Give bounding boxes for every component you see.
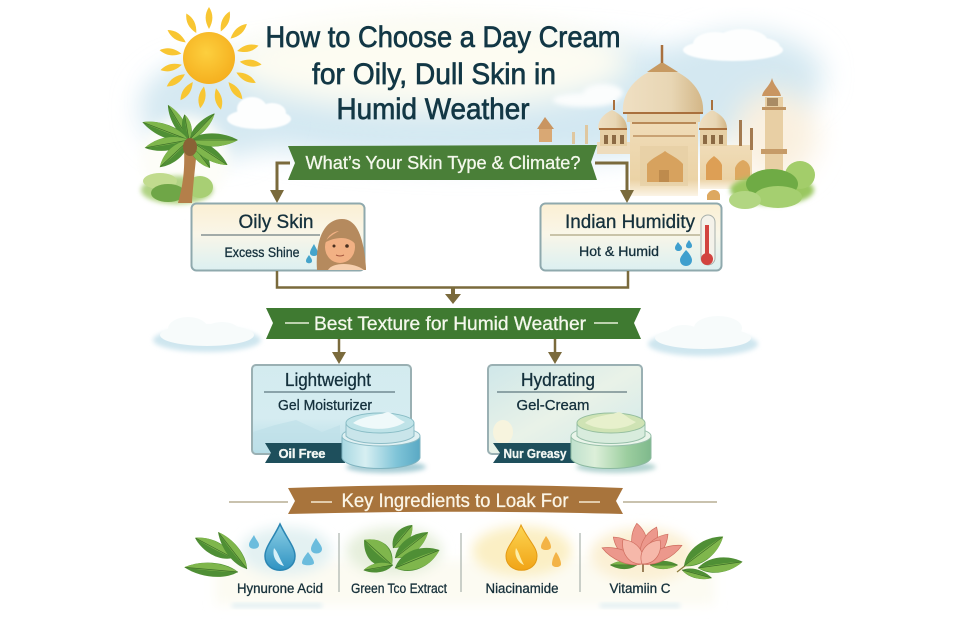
- icon: leaves right: [677, 529, 744, 582]
- label: Hynurone Acid: [237, 581, 323, 596]
- icon: small drops: [249, 535, 322, 565]
- title: [266, 21, 620, 126]
- indian humidity heading: Indian Humidity: [565, 212, 695, 233]
- banner: skin type and climate: What’s Your Skin Type & Climate?: [306, 153, 580, 173]
- icon: girl portrait: [317, 219, 366, 270]
- ingredient: green tea extract: [351, 520, 447, 596]
- arrow: banner to lightweight: [332, 339, 346, 364]
- banner: best texture: Best Texture for Humid Weather: [314, 314, 587, 335]
- banner: skin type and climate: [288, 145, 597, 180]
- tag: nur greasy: Nur Greasy: [504, 446, 567, 461]
- banner: key ingredients: [288, 485, 623, 514]
- header watercolour backdrop: [140, 14, 823, 205]
- icon: tea leaves: [357, 520, 443, 577]
- icon: small oil drops: [541, 536, 561, 567]
- tag: oil free: [265, 443, 345, 463]
- connector: boxes to texture banner: [277, 271, 628, 304]
- icon: oil drop: [506, 525, 537, 570]
- ingredient backdrops: [215, 526, 715, 608]
- indian humidity subtext: Hot & Humid: [579, 243, 659, 259]
- cloud: behind taj: [553, 84, 623, 107]
- icon: water drop: [265, 524, 295, 570]
- icon: gel jar blue: [342, 412, 426, 473]
- icon: sun: [159, 7, 262, 110]
- panel: lightweight gel moisturizer: [252, 365, 426, 473]
- divider lines beside ingredients banner: [229, 501, 717, 503]
- lightweight subtext: Gel Moisturizer: [278, 397, 372, 414]
- illustration: green bush right: [729, 161, 815, 209]
- icon: leaves left: [184, 528, 252, 579]
- ingredient: vitamin c: [600, 522, 744, 596]
- ingredient: niacinamide: [486, 525, 561, 596]
- icon: lotus flower: [600, 522, 684, 572]
- title: How to Choose a Day Cream: [266, 21, 620, 54]
- panel: hydrating gel-cream: [488, 365, 656, 473]
- banner: key ingredients: Key Ingredients to Loak For: [342, 491, 569, 512]
- ingredient: hyaluronic acid: [184, 524, 323, 596]
- lightweight heading: Lightweight: [285, 370, 371, 390]
- banner: best texture: [266, 308, 641, 339]
- label: Green Tco Extract: [351, 581, 447, 596]
- icon: sweat drops: [306, 244, 318, 263]
- oily skin heading: Oily Skin: [238, 212, 314, 233]
- oily skin subtext: Excess Shine: [224, 244, 300, 260]
- panel: indian humidity: [540, 204, 722, 270]
- hydrating heading: Hydrating: [521, 370, 595, 390]
- arrow: banner to indian humidity: [595, 163, 634, 203]
- label: Vitamiin C: [610, 581, 671, 596]
- arrow: banner to oily skin: [270, 163, 290, 203]
- title: for Oily, Dull Skin in: [312, 58, 556, 91]
- illustration: taj mahal: [537, 45, 787, 200]
- hydrating subtext: Gel-Cream: [516, 397, 590, 414]
- title: Humid Weather: [336, 93, 530, 126]
- icon: water drops: [675, 240, 692, 266]
- tag: nur greasy: [493, 443, 577, 463]
- cloud: top right: [683, 29, 783, 61]
- illustration: palm tree and bush: [140, 102, 238, 204]
- panel: oily skin: [192, 204, 366, 270]
- icon: thermometer: [701, 215, 715, 265]
- icon: gel jar green: [571, 412, 656, 473]
- tag: oil free: Oil Free: [278, 446, 326, 461]
- cloud: lower left: [153, 317, 261, 352]
- arrow: banner to hydrating: [548, 339, 562, 364]
- cloud: beside title: [227, 97, 291, 129]
- cloud: lower right: [648, 316, 758, 356]
- label: Niacinamide: [486, 581, 558, 596]
